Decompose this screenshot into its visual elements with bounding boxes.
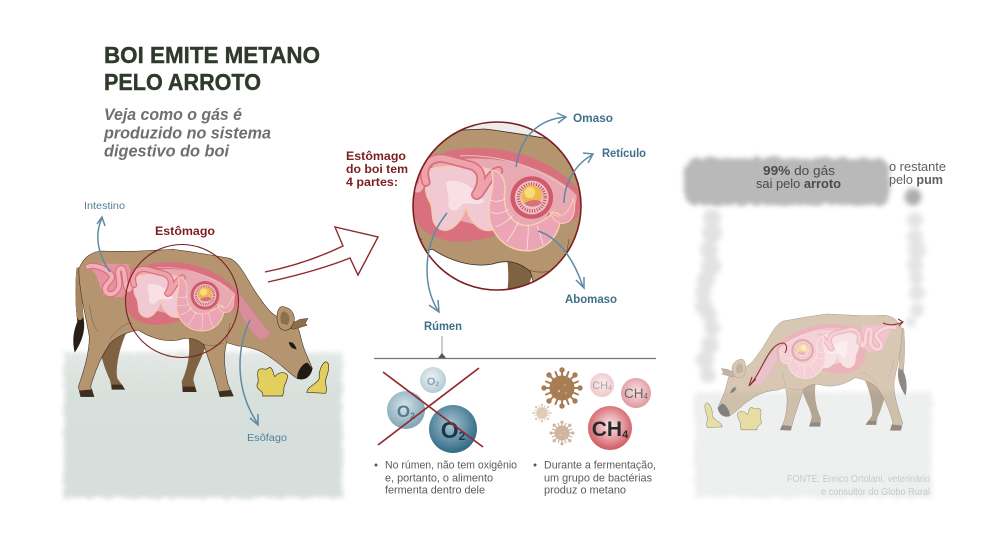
label: Intestino with arrow: Intestino <box>84 200 125 212</box>
text: the rest via fart: o restante <box>889 159 946 174</box>
text: 99% of gas via burp <box>756 163 841 191</box>
label: Estômago: Estômago <box>155 224 215 238</box>
source credit <box>787 474 930 498</box>
icon: crossed-out oxygen molecules: O <box>441 417 459 443</box>
text: bacteria produce methane: um grupo de bactérias <box>544 472 652 484</box>
text: no oxygen in the rumen: fermenta dentro dele <box>385 484 485 496</box>
smoke column: burp <box>695 209 722 383</box>
label: Esôfago with arrow <box>240 320 287 444</box>
text: 99% of gas via burp: 99% do gás <box>763 163 836 178</box>
label: stomach parts heading <box>346 149 408 189</box>
icon: methane molecules: CH <box>624 386 644 401</box>
icon: crossed-out oxygen molecules <box>378 367 483 453</box>
subtitle: Veja como o gás é <box>104 106 242 124</box>
icon: crossed-out oxygen molecules: O <box>397 402 410 421</box>
label: Retículo with arrow <box>564 148 646 203</box>
icon: crossed-out oxygen molecules: 2 <box>459 429 466 443</box>
icon: crossed-out oxygen molecules: O <box>427 376 435 388</box>
text: bacteria produce methane: Durante a fermentação, <box>544 460 656 472</box>
title <box>104 42 320 95</box>
label: stomach parts heading: 4 partes: <box>346 175 398 189</box>
cloud: burp gas <box>684 158 889 205</box>
label: Intestino with arrow <box>84 200 125 272</box>
label: Esôfago with arrow: Esôfago <box>247 432 287 444</box>
icon: methane molecules <box>588 373 651 450</box>
arrow: to stomach detail <box>265 227 378 282</box>
label: Abomaso with arrow: Abomaso <box>565 294 617 306</box>
circle: stomach highlight <box>126 244 238 358</box>
icon: methane molecules: CH <box>592 380 608 392</box>
icon: crossed-out oxygen molecules: 2 <box>435 381 439 388</box>
illustration: cow with gas path <box>705 314 907 430</box>
icon: bacteria <box>533 368 582 445</box>
text: no oxygen in the rumen <box>374 460 517 496</box>
bracket: rumen divider <box>374 336 656 358</box>
icon: methane molecules: 4 <box>622 429 629 441</box>
ground: right <box>694 392 932 498</box>
source credit: FONTE: Enrico Ortolani, veterinário <box>787 474 930 485</box>
icon: crossed-out oxygen molecules: 2 <box>410 411 415 421</box>
circle: stomach detail <box>412 121 582 291</box>
text: the rest via fart: pelo pum <box>889 172 943 187</box>
subtitle <box>103 106 271 160</box>
subtitle: digestivo do boi <box>104 142 229 160</box>
cloud: fart gas <box>904 188 922 206</box>
text: no oxygen in the rumen: e, portanto, o alimento <box>385 472 493 484</box>
icon: methane molecules: 4 <box>608 385 612 392</box>
source credit: e consultor do Globo Rural <box>821 487 930 498</box>
title: PELO ARROTO <box>104 69 261 95</box>
label: Omaso with arrow: Omaso <box>573 113 613 125</box>
label: Abomaso with arrow <box>538 231 617 306</box>
label: stomach parts heading: do boi tem <box>346 162 408 176</box>
text: 99% of gas via burp: sai pelo arroto <box>756 176 841 191</box>
illustration: cow with digestive system <box>73 249 329 397</box>
label: Rúmen with arrow: Rúmen <box>424 321 462 333</box>
text: the rest via fart <box>889 159 946 187</box>
label: Omaso with arrow <box>516 113 613 167</box>
label: Retículo with arrow: Retículo <box>602 148 646 160</box>
text: bacteria produce methane <box>534 460 656 496</box>
text: bacteria produce methane: produz o metano <box>544 484 626 496</box>
smoke column: fart <box>906 212 926 327</box>
subtitle: produzido no sistema <box>103 124 271 142</box>
icon: methane molecules: 4 <box>644 392 649 401</box>
label: stomach parts heading: Estômago <box>346 149 406 163</box>
label: Rúmen with arrow <box>424 213 462 333</box>
title: BOI EMITE METANO <box>104 42 320 68</box>
icon: methane molecules: CH <box>592 418 622 441</box>
ground: left <box>64 352 342 498</box>
text: no oxygen in the rumen: No rúmen, não tem oxigênio <box>385 460 517 472</box>
